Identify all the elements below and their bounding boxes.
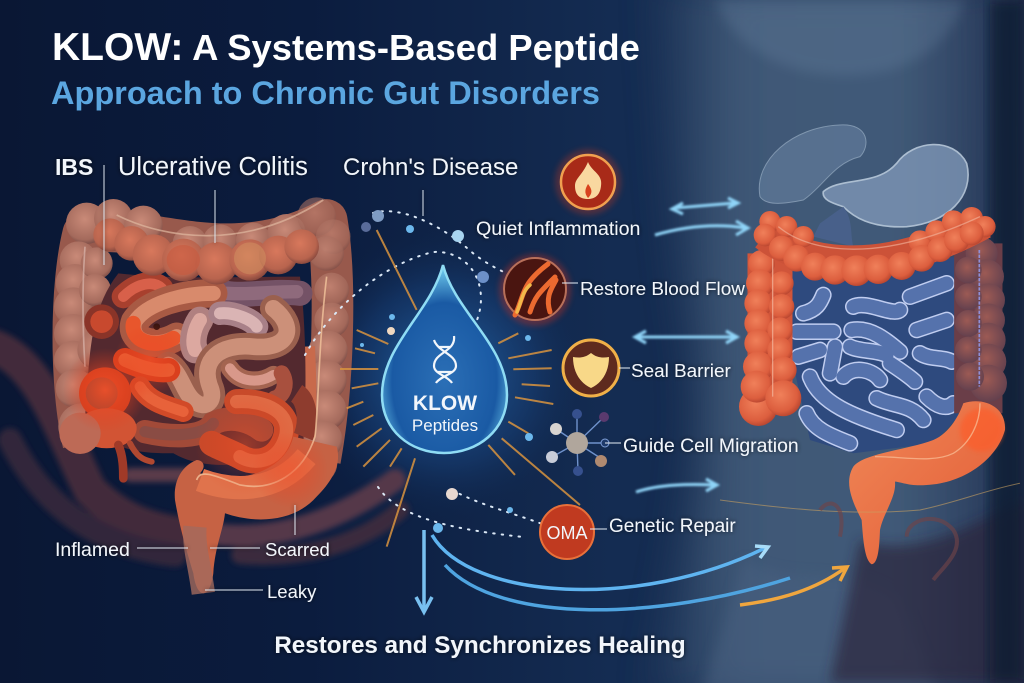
rays — [340, 230, 580, 547]
bottom sweeping arrows — [416, 530, 847, 612]
left labels: Leaky — [267, 581, 317, 602]
loop B — [134, 293, 213, 343]
right intestines — [720, 125, 1020, 580]
loop F — [230, 368, 273, 381]
icon: KLOW drop — [382, 265, 507, 453]
loop K — [212, 402, 287, 461]
label: Quiet Inflammation: Quiet Inflammation — [476, 218, 640, 240]
purple loops — [227, 292, 300, 294]
condition labels: Ulcerative Colitis — [118, 153, 308, 181]
appendix drips — [118, 445, 123, 478]
ascending colon — [54, 241, 116, 450]
condition labels: Crohn's Disease — [343, 154, 518, 181]
hands and tissue behind left intestine — [0, 345, 400, 556]
left labels: Inflamed — [55, 539, 130, 561]
tan loop E — [168, 308, 287, 405]
colon base band — [73, 220, 332, 460]
icon: DNA repair circle — [540, 505, 594, 559]
ascending colon — [702, 253, 837, 407]
icon: blood vessel — [499, 254, 571, 326]
icon: DNA helix — [434, 336, 456, 383]
icon: shield — [563, 340, 619, 396]
sigmoid and rectum — [849, 401, 1005, 564]
glow behind drop — [294, 225, 594, 525]
pink lumps — [193, 320, 200, 350]
dark loop J — [145, 419, 262, 436]
icon: DNA repair circle: OMA — [546, 523, 588, 543]
small bowel loops — [797, 283, 953, 443]
icon: KLOW drop: Peptides — [412, 416, 478, 435]
transverse colon band — [765, 223, 983, 261]
small bowel base — [85, 273, 305, 465]
translucent torso — [640, 0, 1024, 683]
condition labels — [55, 153, 518, 265]
title: KLOW: A Systems-Based Peptide — [52, 26, 640, 69]
small bowel base — [787, 257, 962, 453]
label: Seal Barrier: Seal Barrier — [631, 361, 731, 382]
transverse colon front row — [754, 221, 984, 286]
left labels: Scarred — [265, 539, 330, 560]
title: Approach to Chronic Gut Disorders — [51, 75, 600, 111]
descending colon — [296, 236, 349, 484]
back row colon — [66, 197, 351, 261]
left intestine illustration — [54, 197, 351, 593]
right-side arrows — [635, 198, 748, 492]
label: Restore Blood Flow: Restore Blood Flow — [580, 279, 745, 300]
transverse colon back row — [759, 207, 996, 253]
icon: flame — [555, 149, 621, 215]
bottom caption: Restores and Synchronizes Healing — [274, 632, 686, 659]
left labels — [55, 505, 330, 602]
dotted network around the drop — [305, 211, 545, 537]
red loop I — [140, 387, 183, 412]
label: Guide Cell Migration: Guide Cell Migration — [623, 435, 799, 457]
transverse colon front row — [93, 218, 319, 285]
particles — [360, 210, 533, 533]
title — [51, 26, 640, 111]
dark-red loop top — [123, 284, 162, 297]
descending colon — [906, 243, 1024, 413]
red loop H — [125, 360, 168, 370]
inflamed masses — [84, 304, 119, 339]
connector lines — [562, 283, 630, 529]
pelvic vessels — [720, 483, 1020, 512]
icon: KLOW drop: KLOW — [413, 392, 477, 415]
stomach and liver — [759, 125, 866, 203]
condition labels: IBS — [55, 154, 93, 180]
label: Genetic Repair: Genetic Repair — [609, 516, 736, 537]
sigmoid and rectum — [175, 437, 338, 593]
icon: cell network — [546, 409, 609, 476]
inflamed hot glows — [63, 324, 328, 508]
